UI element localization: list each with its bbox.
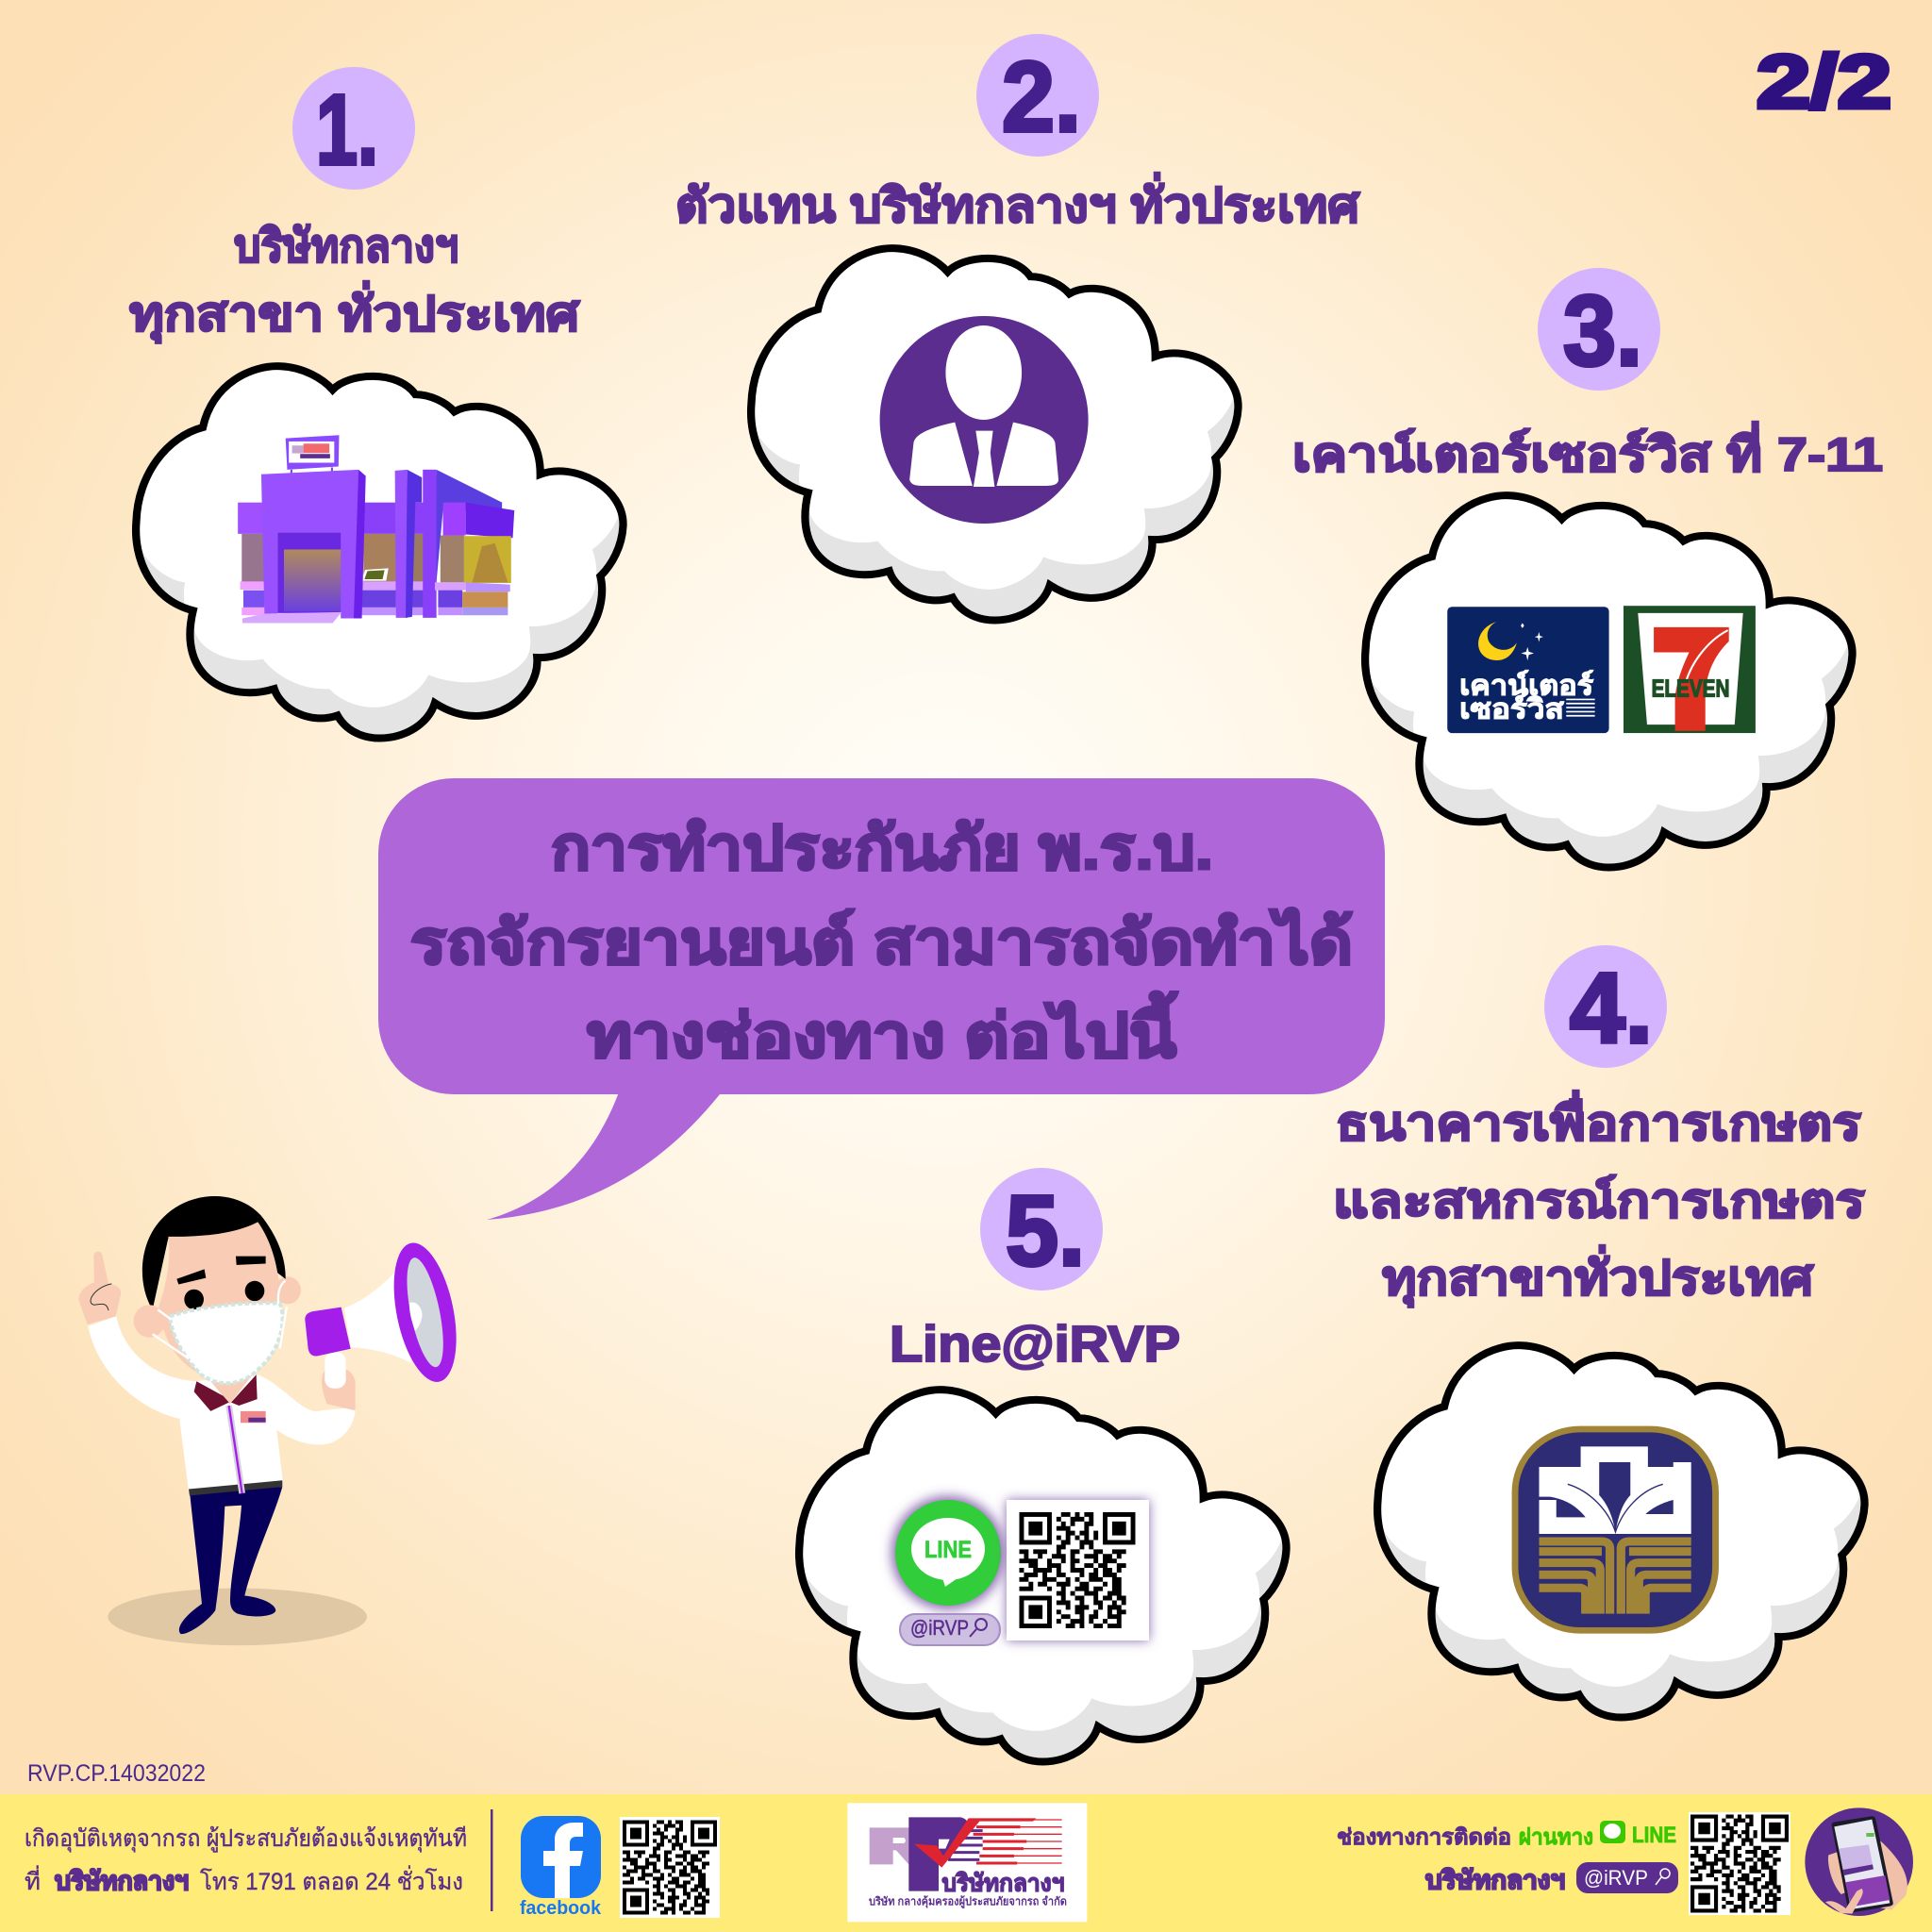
- facebook QR: [620, 1817, 720, 1918]
- icon: facebook: facebook: [520, 1898, 602, 1919]
- panel: channel 1 branches: [122, 67, 641, 738]
- icon: LINE logo: LINE: [924, 1537, 972, 1563]
- megaphone: [305, 1237, 467, 1410]
- company logo: บริษัท กลางคุ้มครองผู้ประสบภัยจากรถ จำกัด: [869, 1895, 1067, 1909]
- footer contact text: ผ่านทาง: [1519, 1824, 1593, 1849]
- speech bubble headline: [378, 778, 1385, 1220]
- LINE ID badge: @iRVP: [910, 1616, 969, 1640]
- panel: channel 3 counter service: 3.: [1563, 275, 1642, 387]
- company logo: บริษัทกลางฯ: [941, 1871, 1064, 1897]
- document code: RVP.CP.14032022: [27, 1760, 206, 1787]
- head: [134, 1196, 301, 1383]
- footer contact text: บริษัทกลางฯ: [1425, 1866, 1565, 1894]
- icon: 7-eleven logo: [1624, 606, 1756, 733]
- panel: channel 1 branches: บริษัทกลางฯ: [234, 222, 458, 272]
- panel: channel 2 agents: ตัวแทน บริษัทกลางฯ ทั่วประเทศ: [675, 173, 1360, 232]
- footer contact text: [1337, 1821, 1678, 1894]
- panel: channel 3 counter service: [1292, 268, 1883, 867]
- QR code: [1007, 1500, 1149, 1641]
- raised hand: [78, 1251, 121, 1324]
- footer contact text: @iRVP: [1584, 1866, 1648, 1890]
- icon: 7-eleven logo: ELEVEN: [1652, 675, 1729, 702]
- panel: channel 4 BAAC: ธนาคารเพื่อการเกษตร: [1336, 1091, 1861, 1150]
- panel: channel 5 LINE: Line@iRVP: [890, 1316, 1180, 1373]
- page number: 2/2: [1757, 40, 1891, 124]
- speech bubble headline: ทางช่องทาง ต่อไปนี้: [587, 991, 1178, 1070]
- icon: facebook: [520, 1816, 602, 1919]
- icon: counter service logo: เซอร์วิส: [1459, 693, 1564, 725]
- panel: channel 2 agents: 2.: [1002, 42, 1081, 153]
- panel: channel 4 BAAC: 4.: [1570, 953, 1653, 1064]
- footer notice text: [25, 1825, 467, 1895]
- panel: channel 4 BAAC: และสหกรณ์การเกษตร: [1333, 1174, 1865, 1227]
- icon: agent person: [880, 316, 1089, 524]
- speech bubble headline: การทำประกันภัย พ.ร.บ.: [551, 814, 1213, 882]
- icon: counter service logo: [1447, 607, 1609, 733]
- icon: LINE logo: [891, 1496, 1005, 1609]
- panel: channel 1 branches: ทุกสาขา ทั่วประเทศ: [129, 281, 580, 343]
- character with megaphone: [78, 1196, 467, 1645]
- icon: counter service logo: เคาน์เตอร์: [1459, 669, 1594, 701]
- footer contact text: LINE: [1632, 1823, 1676, 1848]
- icon: purple branch building: [238, 435, 514, 623]
- LINE QR: [1689, 1812, 1790, 1915]
- icon: phone in hand: [1805, 1807, 1913, 1916]
- panel: channel 4 BAAC: ทุกสาขาทั่วประเทศ: [1382, 1245, 1814, 1307]
- panel: channel 4 BAAC: [1333, 945, 1882, 1717]
- panel: channel 5 LINE: 5.: [1006, 1175, 1085, 1287]
- LINE ID badge: [900, 1614, 1000, 1645]
- footer notice text: โทร 1791 ตลอด 24 ชั่วโมง: [200, 1865, 463, 1895]
- panel: channel 2 agents: [675, 34, 1360, 620]
- footer contact text: ช่องทางการติดต่อ: [1337, 1824, 1511, 1849]
- panel: channel 5 LINE: [785, 1168, 1304, 1761]
- footer notice text: ที่: [25, 1865, 41, 1895]
- panel: channel 3 counter service: เคาน์เตอร์เซอร์วิส ที่ 7-11: [1292, 422, 1883, 481]
- panel: channel 1 branches: 1.: [316, 75, 378, 186]
- icon: BAAC logo: [1515, 1429, 1716, 1630]
- footer notice text: บริษัทกลางฯ: [55, 1867, 189, 1895]
- company logo: [847, 1803, 1087, 1922]
- footer band: [0, 1794, 1932, 1932]
- footer notice text: เกิดอุบัติเหตุจากรถ ผู้ประสบภัยต้องแจ้งเหตุทันที: [25, 1825, 467, 1853]
- speech bubble headline: รถจักรยานยนต์ สามารถจัดทำได้: [410, 908, 1353, 976]
